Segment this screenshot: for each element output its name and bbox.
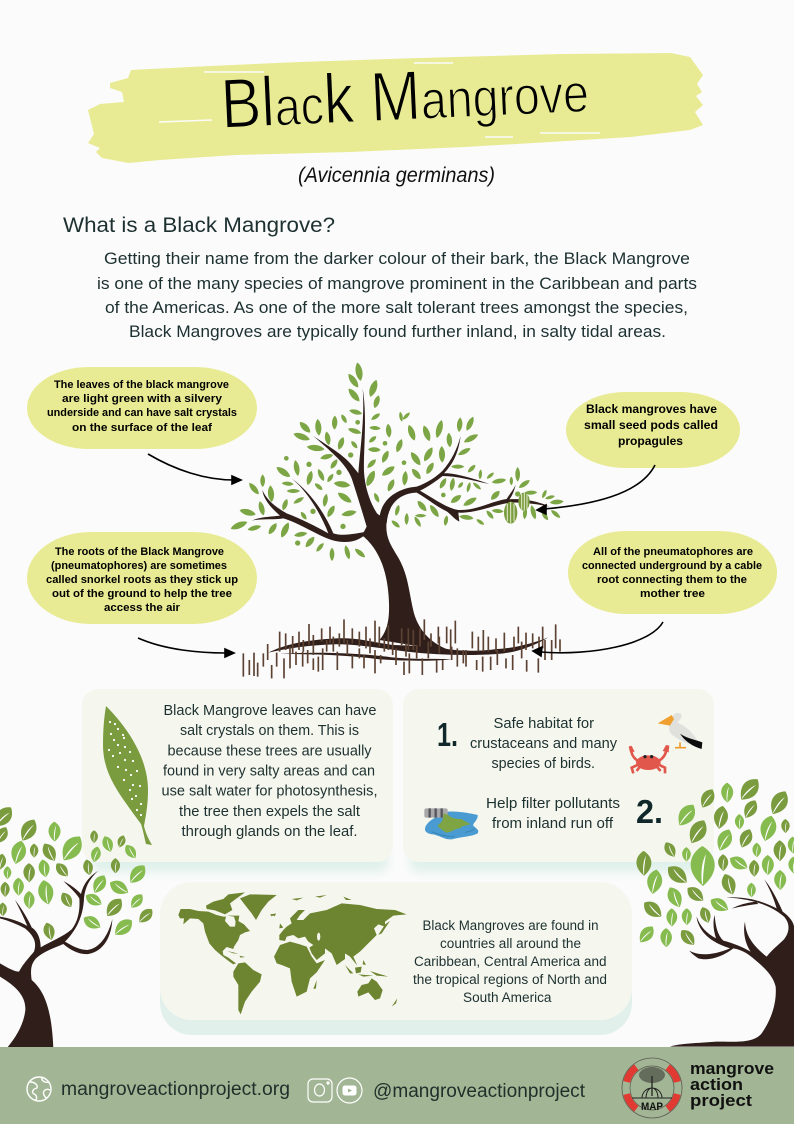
habitat text: Safe habitat for — [494, 715, 594, 732]
intro text: of the Americas. As one of the more salt tolerant trees amongst the species, — [105, 299, 688, 317]
title brush stroke — [88, 53, 703, 163]
logo wordmark — [690, 1059, 774, 1110]
callout: roots — [27, 532, 257, 624]
icon: salty leaf — [103, 706, 152, 845]
callout: seed pods: small seed pods called — [584, 418, 718, 432]
distribution text — [413, 918, 607, 1005]
heading: What is a Black Mangrove? — [63, 214, 335, 237]
intro text: is one of the many species of mangrove prominent in the Caribbean and parts — [97, 275, 697, 293]
arrow: cable root — [533, 622, 663, 656]
callout: cable root: connected underground by a cable — [582, 560, 762, 572]
logo wordmark: project — [690, 1091, 752, 1110]
left decorative tree — [0, 803, 156, 1048]
filter text — [486, 795, 620, 832]
website: mangroveactionproject.org — [61, 1079, 290, 1100]
pneumatophores — [243, 619, 560, 678]
intro text — [97, 250, 697, 341]
black mangrove tree — [230, 362, 564, 678]
number 1: 1. — [437, 716, 458, 753]
callout: roots: The roots of the Black Mangrove — [55, 546, 224, 558]
distribution text: countries all around the — [440, 936, 581, 951]
habitat text: crustaceans and many — [470, 735, 617, 752]
distribution text: the tropical regions of North and — [413, 972, 607, 987]
americas — [178, 892, 277, 1014]
tree trunk and branches — [252, 388, 549, 661]
callout: leaves: on the surface of the leaf — [72, 422, 212, 434]
callout: leaves: are light green with a silvery — [62, 393, 223, 405]
filter text: Help filter pollutants — [486, 795, 620, 812]
callout: cable root: root connecting them to the — [597, 574, 747, 586]
logo wordmark: mangrove — [690, 1059, 774, 1078]
salt crystals text — [162, 702, 378, 840]
salt crystals text: because these trees are usually — [168, 742, 372, 760]
tree leaves — [230, 362, 564, 561]
subtitle: (Avicennia germinans) — [298, 164, 495, 187]
seed pods — [504, 493, 530, 524]
callout: cable root — [568, 531, 777, 614]
callout: roots: access the air — [104, 602, 181, 614]
callout: roots: (pneumatophores) are sometimes — [51, 560, 227, 572]
panel: distribution — [160, 882, 632, 1035]
icon: youtube — [337, 1078, 362, 1103]
right decorative tree — [635, 774, 794, 1047]
salt crystals text: Black Mangrove leaves can have — [164, 702, 376, 719]
number 2: 2. — [636, 793, 663, 830]
callout: leaves: The leaves of the black mangrove — [54, 379, 229, 391]
salt crystals text: salt crystals on them. This is — [180, 722, 359, 739]
intro text: Black Mangroves are typically found further inland, in salty tidal areas. — [129, 323, 666, 341]
callout: roots: out of the ground to help the tree — [52, 588, 232, 600]
arrow: roots — [138, 638, 234, 657]
callout: cable root: All of the pneumatophores are — [593, 546, 753, 558]
logo wordmark: action — [690, 1075, 743, 1094]
salt crystals text: found in very salty areas and can — [163, 762, 375, 780]
footer — [0, 1047, 794, 1124]
icon: polluted pond — [424, 808, 478, 839]
world map — [178, 892, 407, 1014]
callout: seed pods — [566, 392, 740, 468]
distribution text: South America — [463, 990, 552, 1005]
eurasia africa oceania — [272, 895, 407, 1007]
card shadow glow — [92, 850, 710, 872]
panel: benefits — [403, 689, 714, 862]
icon: pelican — [658, 713, 702, 749]
salt crystals text: the tree then expels the salt — [179, 803, 361, 820]
salt crystals text: use salt water for photosynthesis, — [162, 782, 378, 800]
social handle: @mangroveactionproject — [373, 1081, 586, 1102]
callout: cable root: mother tree — [640, 588, 705, 600]
habitat text: species of birds. — [492, 755, 595, 772]
logo — [622, 1058, 682, 1118]
panel: salt crystals — [82, 689, 393, 862]
intro text: Getting their name from the darker colour of their bark, the Black Mangrove — [104, 250, 690, 268]
distribution text: Caribbean, Central America and — [414, 954, 606, 969]
habitat text — [470, 715, 617, 772]
callout: leaves — [27, 367, 257, 449]
salt crystals text: through glands on the leaf. — [182, 823, 358, 840]
arrow: leaves — [148, 454, 241, 484]
distribution text: Black Mangroves are found in — [422, 918, 598, 933]
callout: roots: called snorkel roots as they stick up — [46, 574, 238, 586]
icon: crab — [629, 745, 669, 773]
logo: MAP — [641, 1101, 663, 1113]
icon: instagram — [308, 1079, 332, 1102]
title: Black Mangrove — [219, 48, 590, 143]
arrow: seed pods — [537, 465, 655, 514]
callout: seed pods: Black mangroves have — [586, 402, 717, 416]
callout: leaves: underside and can have salt crystals — [47, 407, 237, 419]
callout: seed pods: propagules — [618, 434, 683, 448]
filter text: from inland run off — [492, 815, 614, 832]
icon: globe — [27, 1077, 51, 1101]
